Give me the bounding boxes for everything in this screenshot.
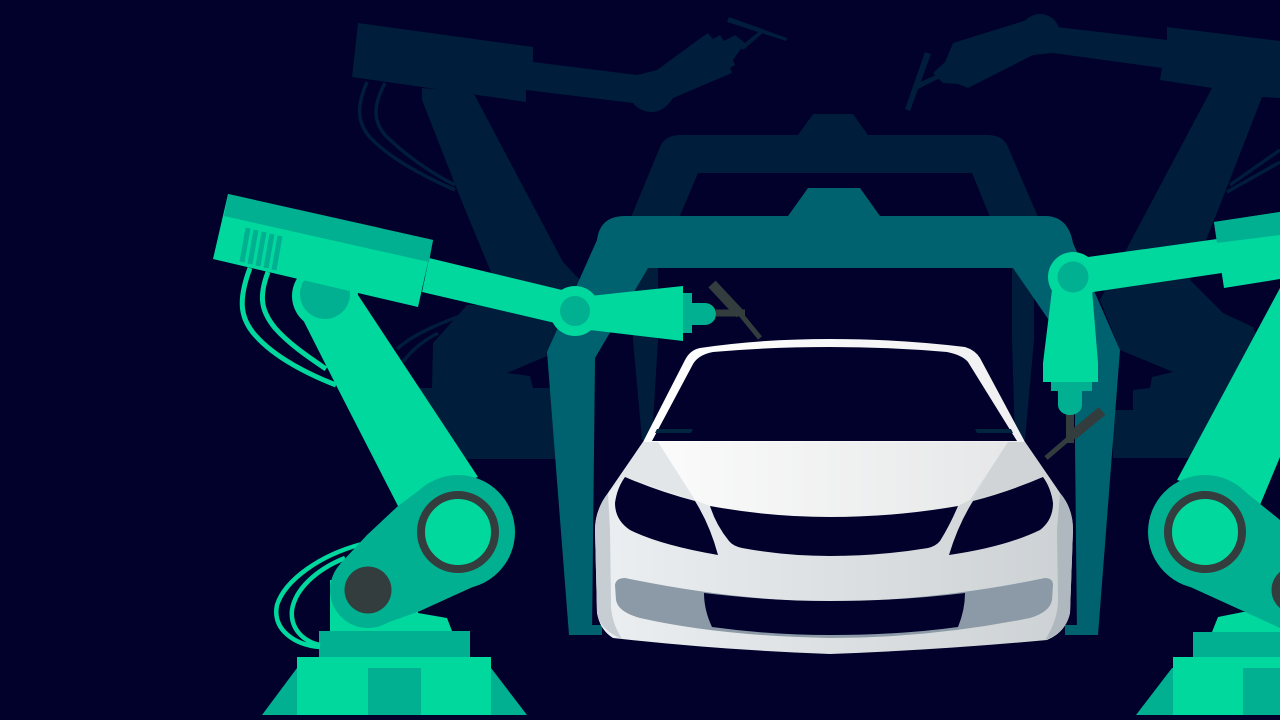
elbow ring: [421, 495, 495, 569]
base side feet: [262, 668, 527, 715]
elbow ring: [1168, 495, 1242, 569]
upper arm: [293, 295, 478, 506]
car: [595, 339, 1073, 654]
rear gantry frame: [610, 114, 1060, 440]
base upper block: [319, 631, 470, 657]
hood: [658, 442, 1008, 517]
base lower block: [297, 657, 491, 715]
head top band: [1214, 212, 1280, 243]
neck: [330, 580, 452, 631]
base door: [368, 668, 421, 715]
forearm: [422, 258, 683, 341]
wrist joint: [1048, 252, 1098, 302]
front robot left: [213, 194, 760, 715]
head: [213, 194, 433, 307]
wrist joint centre: [560, 296, 590, 326]
upper arm: [1177, 288, 1280, 505]
shoulder cap: [292, 263, 358, 329]
gripper nose: [1058, 391, 1082, 415]
left headlight: [615, 477, 718, 555]
welding tool: [1046, 411, 1102, 458]
base upper block: [1193, 632, 1280, 657]
gripper step: [683, 293, 692, 333]
right side panel: [1045, 493, 1073, 640]
wrist joint: [550, 286, 600, 336]
head top band: [224, 194, 433, 262]
neck: [1212, 612, 1280, 632]
lower link: [330, 475, 515, 628]
lower grille: [704, 593, 965, 635]
windshield: [652, 347, 1017, 441]
right headlight: [949, 477, 1053, 555]
shoulder inner: [300, 269, 350, 319]
gripper nose: [692, 303, 716, 325]
lower bumper intake: [615, 578, 1053, 638]
right fender: [973, 442, 1060, 500]
base side feet: [1136, 668, 1280, 715]
rear robot arm left: [352, 17, 787, 459]
pivot: [344, 566, 392, 614]
gripper step: [1051, 382, 1092, 391]
rear robot arm right: [905, 14, 1280, 458]
base door: [1243, 668, 1280, 715]
front gantry frame: [547, 188, 1120, 635]
lower cables: [276, 544, 362, 647]
lower link: [1148, 475, 1280, 628]
upper cables: [242, 268, 336, 385]
front robot right: [1043, 212, 1280, 715]
welding tool: [712, 284, 760, 338]
pivot: [1272, 566, 1280, 614]
car body shell: [595, 442, 1073, 654]
upper grille: [710, 506, 958, 556]
left side panel: [595, 493, 622, 639]
left fender: [608, 442, 695, 500]
forearm: [1088, 239, 1222, 292]
windshield inner bars: [655, 429, 1013, 433]
gripper body: [1043, 290, 1098, 382]
windshield frame: [643, 339, 1025, 442]
base lower block: [1173, 657, 1280, 715]
wrist joint centre: [1058, 262, 1088, 292]
head: [1214, 212, 1280, 288]
head vents: [242, 228, 280, 270]
